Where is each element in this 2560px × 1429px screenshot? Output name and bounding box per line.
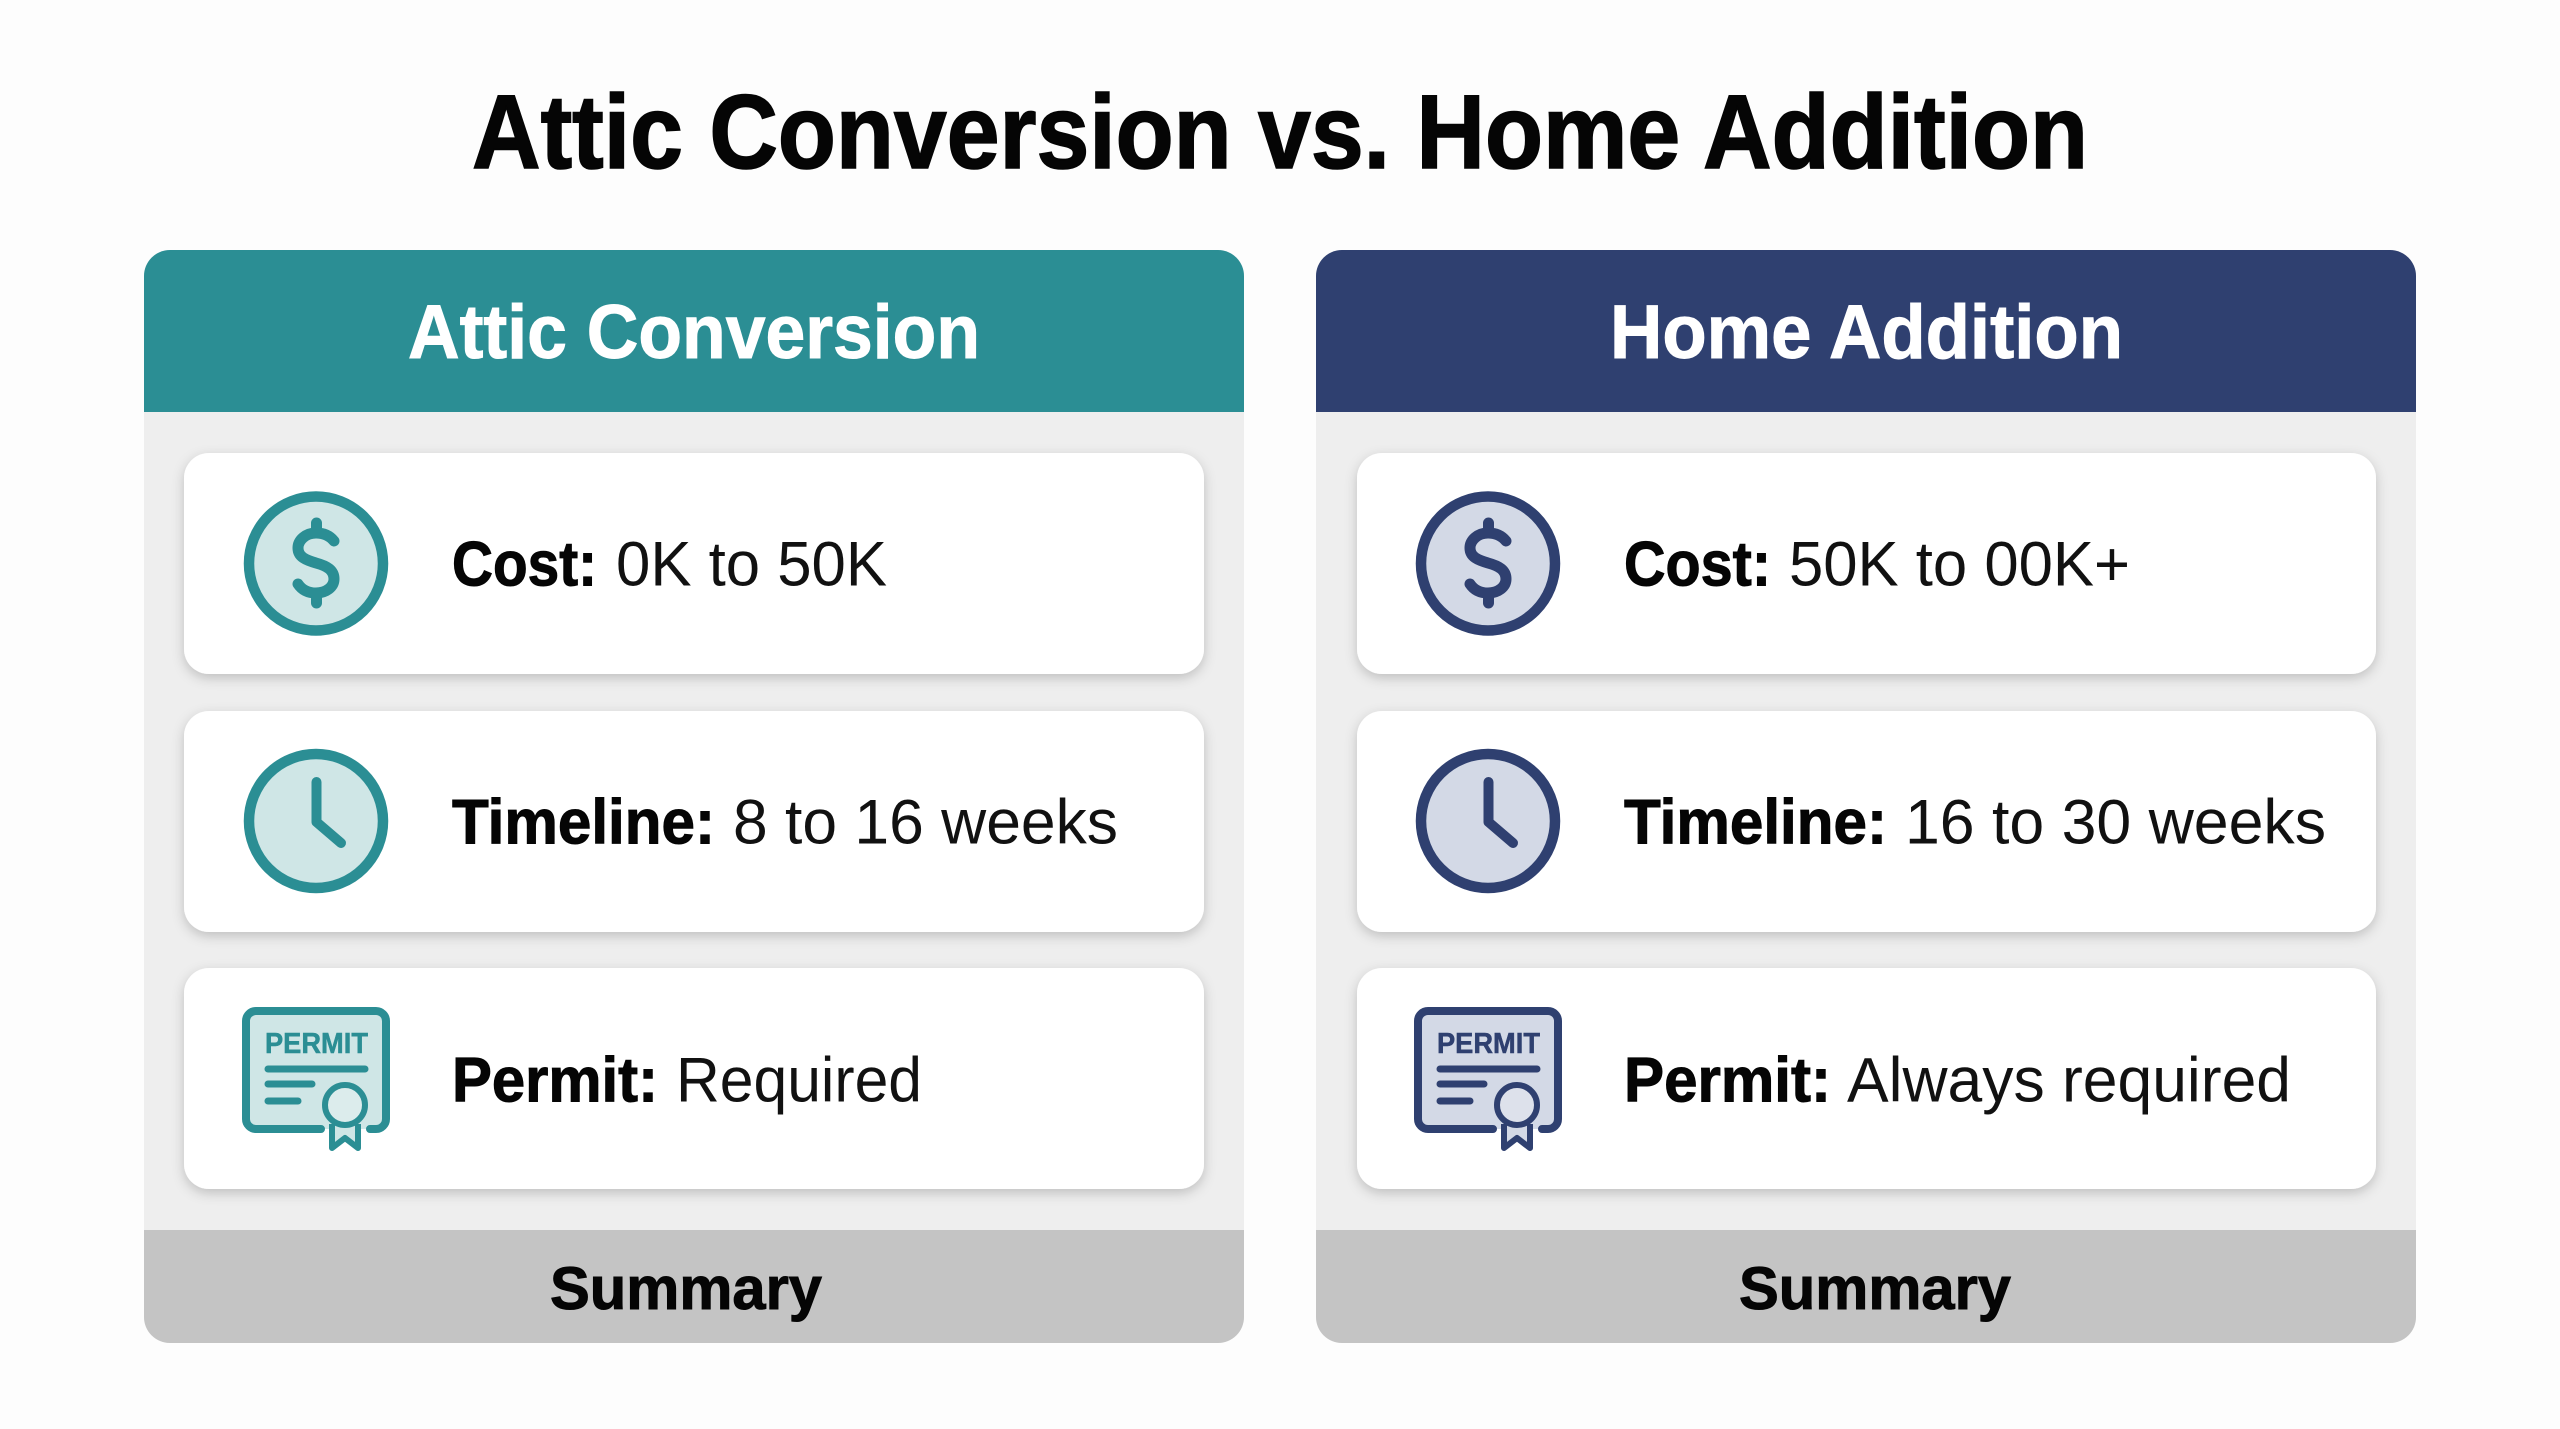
panel header (1316, 250, 2416, 412)
icon: dollar coin (1421, 496, 1555, 630)
cost text: Cost: (1624, 530, 1771, 600)
cost text: Cost: (452, 530, 597, 600)
icon: clock (1421, 754, 1555, 888)
card: timeline (184, 711, 1204, 932)
timeline text: 8 to 16 weeks (733, 788, 1118, 858)
timeline text: 16 to 30 weeks (1905, 788, 2326, 858)
timeline text: Timeline: (1624, 788, 1887, 858)
permit text (452, 1046, 922, 1116)
cost text: 50K to 00K+ (1789, 530, 2130, 600)
permit text: Permit: (452, 1046, 658, 1116)
panel body (144, 250, 1244, 1343)
permit text: Permit: (1624, 1046, 1831, 1116)
cost text: 0K to 50K (616, 530, 887, 600)
card: permit (184, 968, 1204, 1189)
timeline text: Timeline: (452, 788, 715, 858)
panel body (1316, 250, 2416, 1343)
summary bar: Summary (1739, 1255, 2012, 1322)
summary bar (1316, 1230, 2416, 1343)
title: Attic Conversion vs. Home Addition (472, 74, 2088, 191)
card: timeline (1357, 711, 2376, 932)
icon: permit certificate (246, 1011, 386, 1148)
card: cost (184, 453, 1204, 674)
cost text (1624, 530, 2130, 600)
card: permit (1357, 968, 2376, 1189)
summary bar: Summary (550, 1255, 823, 1322)
icon: clock (249, 754, 383, 888)
permit text: Required (676, 1046, 922, 1116)
cost text (452, 530, 887, 600)
icon: dollar coin (249, 496, 383, 630)
panel header (144, 250, 1244, 412)
summary bar (144, 1230, 1244, 1343)
panel header: Attic Conversion (408, 290, 980, 375)
permit text (1624, 1046, 2291, 1116)
card: cost (1357, 453, 2376, 674)
permit text: Always required (1847, 1046, 2291, 1116)
icon: permit certificate (1418, 1011, 1558, 1148)
panel: home addition (1316, 250, 2416, 1343)
timeline text (452, 788, 1118, 858)
timeline text (1624, 788, 2326, 858)
panel header: Home Addition (1610, 290, 2123, 375)
icon: permit certificate: PERMIT (1437, 1028, 1540, 1060)
icon: permit certificate: PERMIT (265, 1028, 368, 1060)
panel: attic conversion (144, 250, 1244, 1343)
